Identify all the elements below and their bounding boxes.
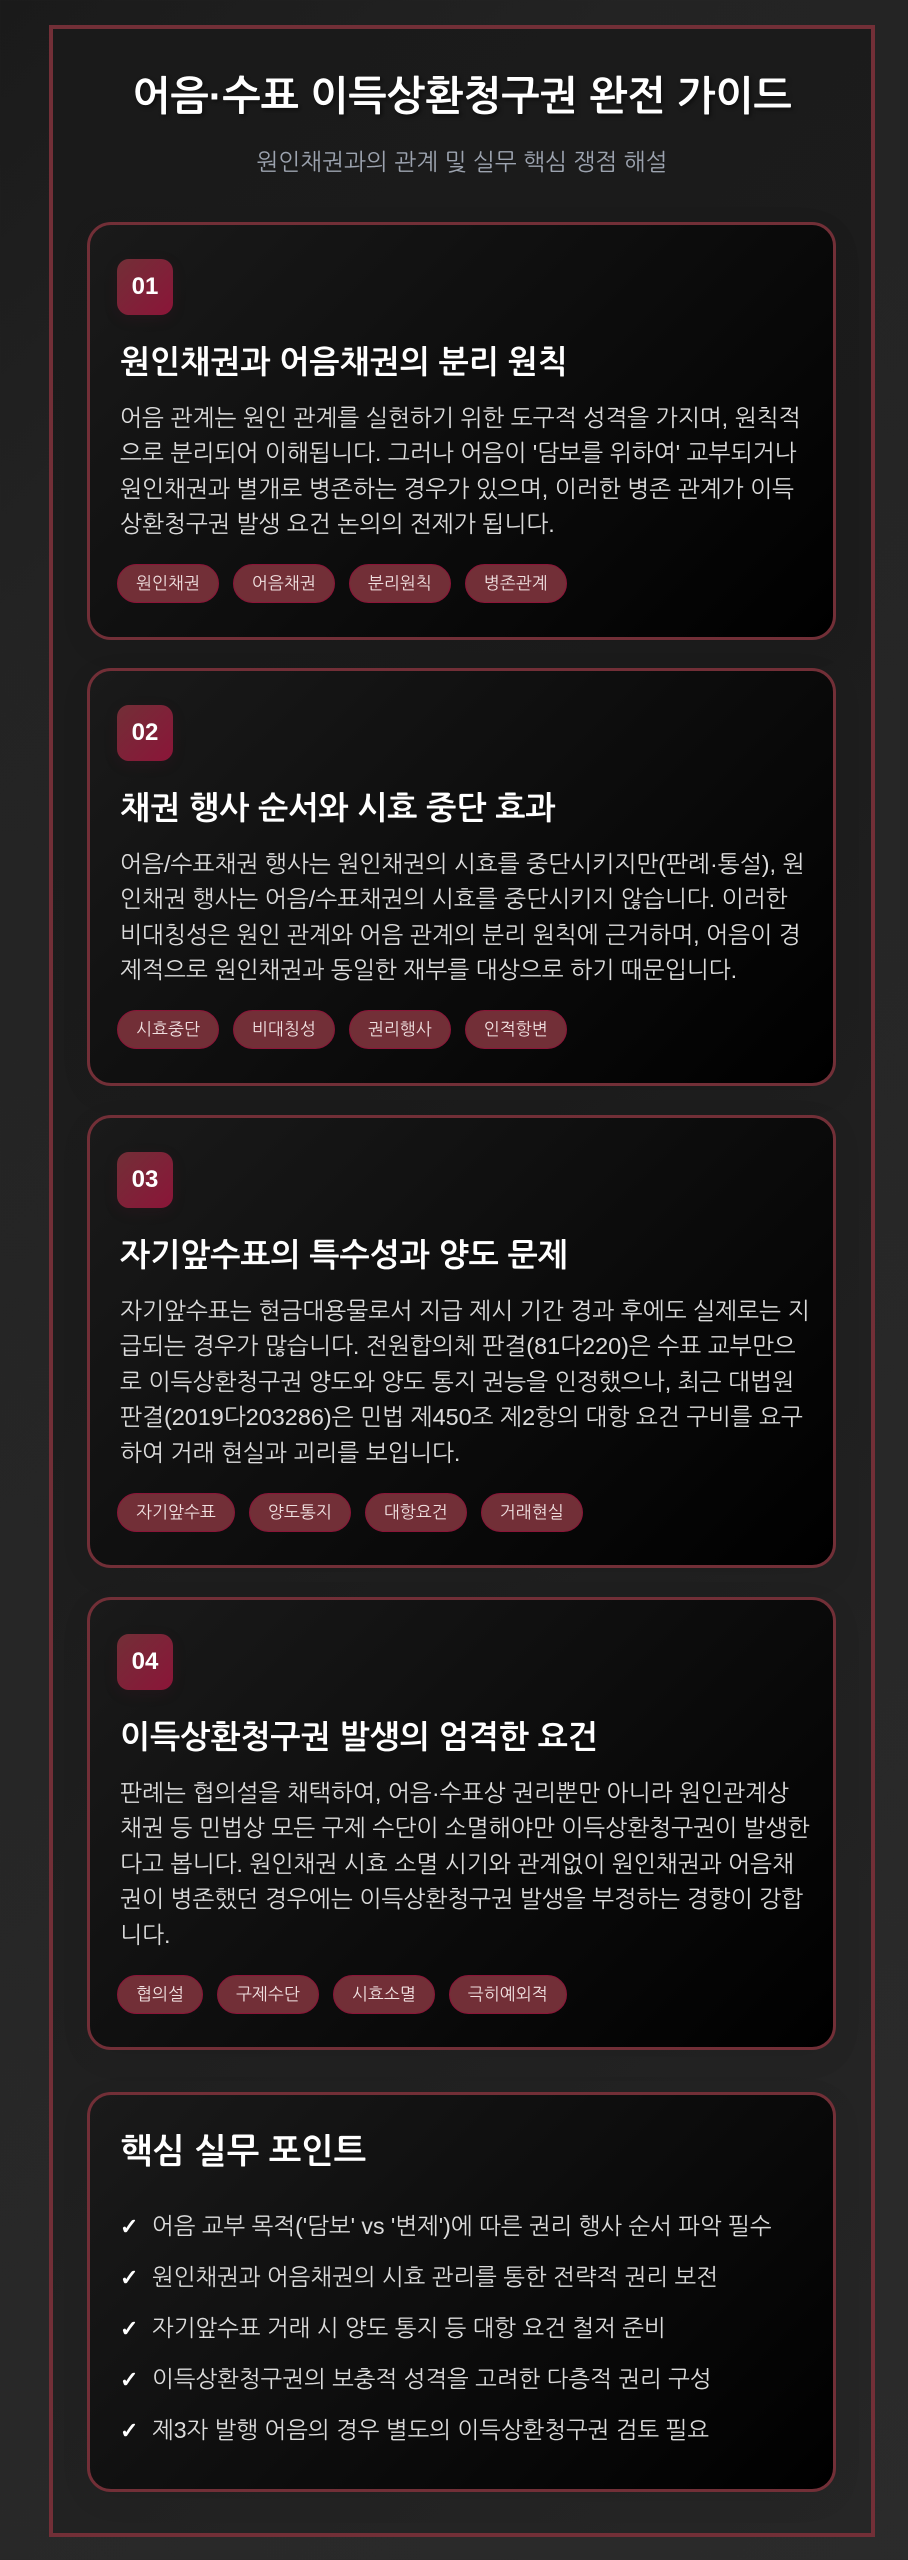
- tags 01: 원인채권: [136, 574, 200, 593]
- tags 04: [117, 1975, 567, 2014]
- tags 02: 인적항변: [484, 1020, 548, 1039]
- text block 04: 니다.: [120, 1922, 170, 1948]
- tags 04: 극히예외적: [468, 1985, 548, 2004]
- heading 04: 이득상환청구권 발생의 엄격한 요건: [120, 1719, 598, 1755]
- point 1: 어음 교부 목적('담보' vs '변제')에 따른 권리 행사 순서 파악 필수: [152, 2213, 772, 2239]
- tags 02: [117, 1010, 567, 1049]
- subtitle: 원인채권과의 관계 및 실무 핵심 쟁점 해설: [256, 149, 668, 175]
- text block 01: 상환청구권 발생 요건 논의의 전제가 됩니다.: [120, 511, 555, 537]
- tags 01: 어음채권: [252, 574, 316, 593]
- text block 01: 으로 분리되어 이해됩니다. 그러나 어음이 '담보를 위하여' 교부되거나: [120, 440, 797, 466]
- text block 04: [120, 1780, 810, 1948]
- point 4: ✓: [120, 2367, 138, 2392]
- panel: key practical points: [87, 2092, 836, 2492]
- tags 04: 협의설: [136, 1985, 184, 2004]
- text block 04: 권이 병존했던 경우에는 이득상환청구권 발생을 부정하는 경향이 강합: [120, 1886, 803, 1912]
- panel: section 03: [87, 1115, 836, 1568]
- tags 03: 대항요건: [384, 1503, 448, 1522]
- text block 03: 자기앞수표는 현금대용물로서 지급 제시 기간 경과 후에도 실제로는 지: [120, 1298, 810, 1324]
- text block 01: [120, 405, 801, 537]
- point 3: ✓: [120, 2316, 138, 2341]
- badge 01: 01: [132, 273, 158, 300]
- text block 01: 원인채권과 별개로 병존하는 경우가 있으며, 이러한 병존 관계가 이득: [120, 476, 794, 502]
- text block 04: 채권 등 민법상 모든 구제 수단이 소멸해야만 이득상환청구권이 발생한: [120, 1815, 810, 1841]
- title: 어음·수표 이득상환청구권 완전 가이드: [132, 73, 792, 119]
- panel: section 02: [87, 668, 836, 1086]
- text block 03: [120, 1298, 810, 1466]
- tags 04: 구제수단: [236, 1985, 300, 2004]
- tags 04: 시효소멸: [352, 1985, 416, 2004]
- badge 04: 04: [132, 1648, 158, 1675]
- tags 02: 권리행사: [368, 1020, 432, 1039]
- tags 03: 자기앞수표: [136, 1503, 216, 1522]
- text block 04: 다고 봅니다. 원인채권 시효 소멸 시기와 관계없이 원인채권과 어음채: [120, 1851, 794, 1877]
- point 4: 이득상환청구권의 보충적 성격을 고려한 다층적 권리 구성: [152, 2366, 712, 2392]
- badge 02: [117, 705, 173, 761]
- tags 01: 병존관계: [484, 574, 548, 593]
- text block 02: [120, 851, 804, 983]
- text block 03: 판결(2019다203286)은 민법 제450조 제2항의 대항 요건 구비를 요구: [120, 1404, 803, 1430]
- point 1: ✓: [120, 2214, 138, 2239]
- text block 02: 인채권 행사는 어음/수표채권의 시효를 중단시키지 않습니다. 이러한: [120, 886, 788, 912]
- point 5: 제3자 발행 어음의 경우 별도의 이득상환청구권 검토 필요: [152, 2417, 709, 2443]
- text block 02: 제적으로 원인채권과 동일한 재부를 대상으로 하기 때문입니다.: [120, 957, 737, 983]
- text block 03: 로 이득상환청구권 양도와 양도 통지 권능을 인정했으나, 최근 대법원: [120, 1369, 794, 1395]
- tags 01: [117, 564, 567, 603]
- tags 03: [117, 1493, 583, 1532]
- point 5: ✓: [120, 2418, 138, 2443]
- text block 01: 어음 관계는 원인 관계를 실현하기 위한 도구적 성격을 가지며, 원칙적: [120, 405, 801, 431]
- tags 02: 비대칭성: [252, 1020, 316, 1039]
- point 2: 원인채권과 어음채권의 시효 관리를 통한 전략적 권리 보전: [152, 2264, 718, 2290]
- tags 01: 분리원칙: [368, 574, 432, 593]
- text block 04: 판례는 협의설을 채택하여, 어음·수표상 권리뿐만 아니라 원인관계상: [120, 1780, 789, 1806]
- tags 03: 양도통지: [268, 1503, 332, 1522]
- text block 03: 하여 거래 현실과 괴리를 보입니다.: [120, 1440, 460, 1466]
- badge 03: [117, 1152, 173, 1208]
- text block 02: 어음/수표채권 행사는 원인채권의 시효를 중단시키지만(판례·통설), 원: [120, 851, 804, 877]
- point 3: 자기앞수표 거래 시 양도 통지 등 대항 요건 철저 준비: [152, 2315, 666, 2341]
- badge 03: 03: [132, 1166, 158, 1193]
- panel: section 01: [87, 222, 836, 640]
- heading: key points: 핵심 실무 포인트: [120, 2133, 366, 2171]
- badge 04: [117, 1634, 173, 1690]
- heading 01: 원인채권과 어음채권의 분리 원칙: [120, 344, 568, 380]
- tags 02: 시효중단: [136, 1020, 200, 1039]
- text block 03: 급되는 경우가 많습니다. 전원합의체 판결(81다220)은 수표 교부만으: [120, 1333, 796, 1359]
- point 2: ✓: [120, 2265, 138, 2290]
- badge 02: 02: [132, 719, 158, 746]
- heading 02: 채권 행사 순서와 시효 중단 효과: [120, 790, 556, 826]
- tags 03: 거래현실: [500, 1503, 564, 1522]
- badge 01: [117, 259, 173, 315]
- heading 03: 자기앞수표의 특수성과 양도 문제: [120, 1237, 568, 1273]
- text block 02: 비대칭성은 원인 관계와 어음 관계의 분리 원칙에 근거하며, 어음이 경: [120, 922, 801, 948]
- panel: section 04: [87, 1597, 836, 2050]
